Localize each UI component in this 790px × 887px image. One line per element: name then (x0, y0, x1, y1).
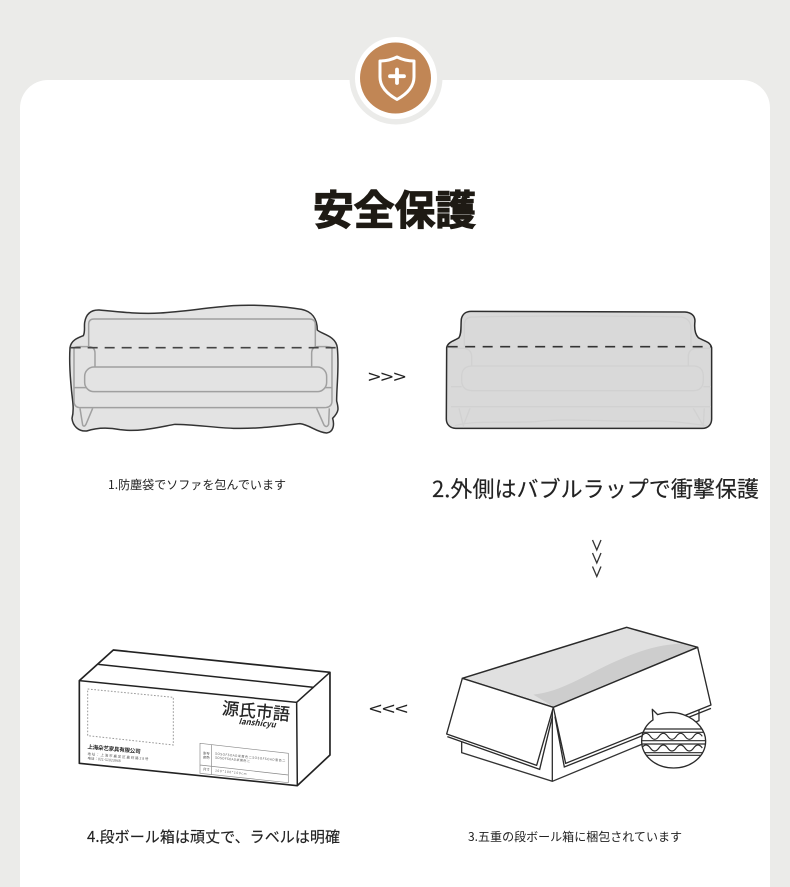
spec table (200, 743, 288, 783)
right arm (312, 347, 332, 367)
seat cushion (85, 367, 327, 392)
box edges (79, 664, 330, 786)
company address: 地址：上海市嘉定区嘉旺路28号 (87, 751, 149, 762)
illustration: labelled shipping box: 颜色 (203, 754, 211, 760)
illustration: sofa in bubble wrap (446, 311, 712, 428)
faint sofa (451, 316, 711, 426)
arrow: step 2 to 3 (592, 540, 601, 576)
caption: step 1: 1.防塵袋でソファを包んでいます (108, 476, 286, 493)
sofa back (89, 319, 315, 348)
top face shading (533, 643, 696, 707)
illustration: carton with five-layer wall (447, 627, 711, 781)
address area (88, 689, 173, 745)
left arm (74, 347, 332, 408)
illustration: labelled shipping box: 尺寸 (203, 766, 211, 772)
brand sub-mark: Ianshicyu (238, 715, 277, 731)
company name: 上海朵艺家具有限公司 (87, 743, 141, 755)
arrow: step 3 to 4: <<< (369, 695, 408, 722)
left flap (447, 678, 553, 765)
legs (80, 408, 329, 427)
box body (79, 650, 330, 786)
inner box (462, 710, 699, 781)
caption: step 2: 2.外側はバブルラップで衝撃保護 (432, 472, 759, 504)
base line (74, 385, 332, 390)
title: 安全保護 (313, 178, 476, 236)
company phone: 电话：021-51023948 (87, 755, 121, 764)
dashed line (71, 345, 337, 350)
right flap (553, 647, 711, 763)
illustration: labelled shipping box (79, 650, 330, 786)
caption: step 4: 4.段ボール箱は頑丈で、ラベルは明確 (87, 826, 340, 847)
spec labels: 型号 (203, 750, 211, 756)
illustration: labelled shipping box: SOSOFSOAD米黄色二 (215, 755, 250, 763)
arrow: step 1 to 2: >>> (368, 363, 406, 390)
icon: shield badge (350, 32, 442, 124)
magnifier: corrugated cross-section (638, 709, 708, 768)
brand name: 源氏市語 (221, 694, 291, 725)
dashed line (448, 344, 711, 349)
illustration: labelled shipping box: 100*100*100cm (215, 768, 247, 776)
spec values: SOSOFSOAD米黄色二SOSOFSOAD黑色二 (215, 751, 286, 763)
top face (462, 627, 698, 707)
dust bag outline (70, 305, 338, 433)
caption: step 3: 3.五重の段ボール箱に梱包されています (468, 828, 682, 845)
wrap outline (446, 311, 712, 428)
illustration: sofa in dust bag (70, 305, 338, 433)
top face edge (462, 627, 698, 707)
